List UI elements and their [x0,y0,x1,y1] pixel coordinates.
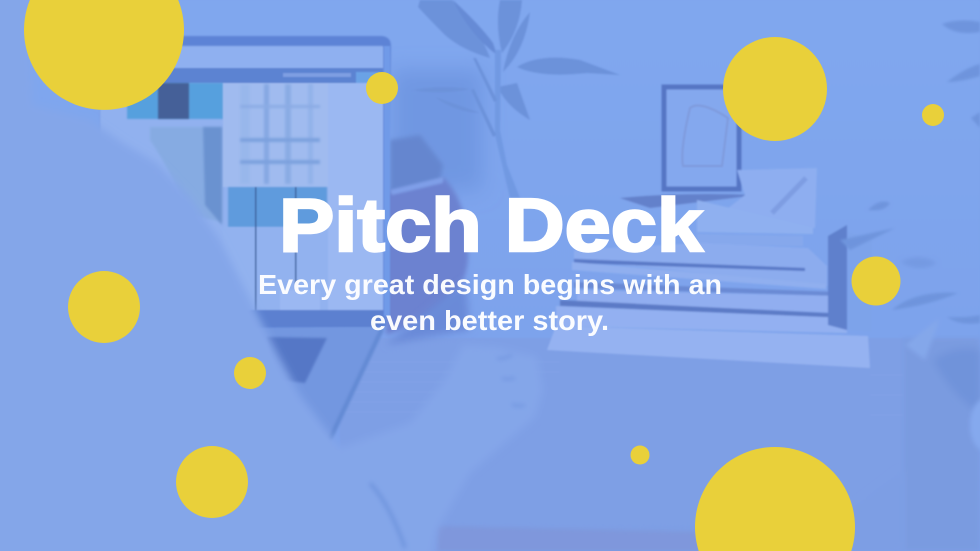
keyboard [266,337,327,383]
subtitle: Every great design begins with an [258,269,722,300]
laptop base [268,328,378,429]
title: Pitch Deck [279,183,703,267]
circle: left middle [68,271,140,343]
wall shadow beside laptop [392,70,482,190]
subtitle: even better story. [370,305,609,336]
screen [100,45,384,252]
subtitle [258,269,722,336]
wrist fold [370,483,405,548]
screen grid panel [223,83,328,187]
circle: top right large [723,37,827,141]
plant pot behind laptop [385,135,470,345]
screen bezel [182,36,392,328]
right side foliage [840,20,980,451]
person in foreground [0,130,340,551]
screen photo thumbnails [127,83,223,119]
desk surface [438,339,978,551]
picture frame [664,87,739,189]
circle: right middle [852,256,900,306]
circle: tiny bottom center [630,446,650,464]
hand knuckle shading [497,355,525,406]
circle: small left [234,357,266,389]
circle: top left large [24,0,184,110]
circle: bottom right large [695,447,855,551]
laptop [100,36,391,442]
plant stem and leaves [413,0,620,198]
circle: small top right [922,104,944,126]
books stack [547,168,872,368]
circle: bottom left [176,446,248,518]
circle: small on laptop [366,72,398,104]
